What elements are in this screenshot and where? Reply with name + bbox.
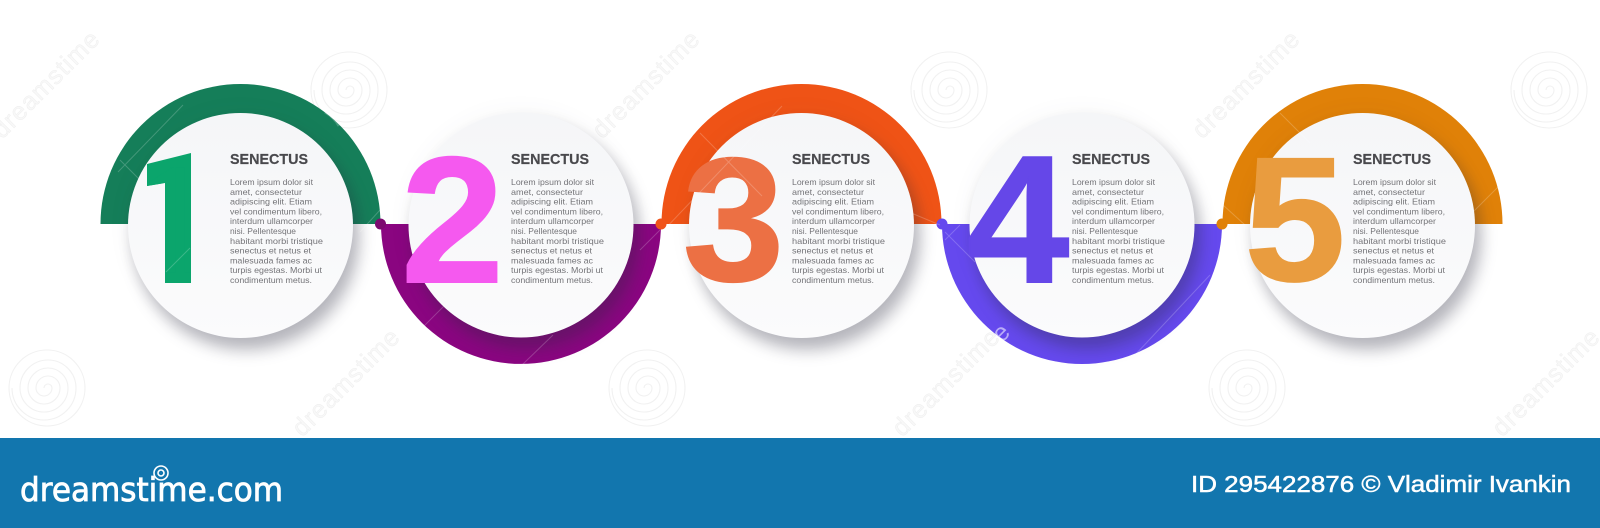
number 3: 3	[683, 122, 784, 319]
body text: Lorem ipsum dolor sit	[792, 177, 876, 187]
body text: malesuada fames ac	[792, 255, 874, 265]
body text: vel condimentum libero,	[511, 206, 603, 216]
orange arc	[662, 84, 942, 224]
heading: SENECTUS	[1353, 151, 1431, 168]
green arc	[100, 84, 380, 224]
card circle	[1250, 113, 1475, 338]
panel: step 5	[1222, 84, 1502, 338]
card circle	[970, 112, 1194, 338]
watermark spirals and wordmarks: dreamstime	[1187, 25, 1306, 144]
number 2: 2	[401, 120, 504, 321]
heading: SENECTUS	[1072, 151, 1150, 168]
number 4: 4	[967, 117, 1069, 321]
body text: nisi. Pellentesque	[511, 226, 577, 236]
card circle	[128, 113, 353, 338]
heading: SENECTUS	[511, 151, 589, 168]
body text: condimentum metus.	[792, 275, 874, 285]
body text: Lorem ipsum dolor sit	[230, 177, 314, 187]
body text: adipiscing elit. Etiam	[792, 197, 874, 207]
body text	[1353, 177, 1446, 285]
violet arc	[942, 224, 1222, 364]
body text: adipiscing elit. Etiam	[1353, 197, 1435, 207]
body text: senectus et netus et	[511, 246, 593, 256]
body text: vel condimentum libero,	[230, 206, 322, 216]
body text: turpis egestas. Morbi ut	[1072, 265, 1165, 275]
panel: step 2	[381, 112, 661, 364]
body text: adipiscing elit. Etiam	[230, 197, 312, 207]
body text: senectus et netus et	[792, 246, 874, 256]
body text: habitant morbi tristique	[1353, 236, 1446, 246]
watermark spirals and wordmarks	[0, 25, 1600, 442]
body text	[792, 177, 885, 285]
body text: interdum ullamcorper	[230, 216, 313, 226]
body text: condimentum metus.	[511, 275, 593, 285]
heading: SENECTUS	[230, 151, 308, 168]
body text: amet, consectetur	[230, 187, 302, 197]
body text: amet, consectetur	[511, 187, 583, 197]
purple arc	[381, 224, 661, 364]
body text: interdum ullamcorper	[1072, 216, 1155, 226]
body text: Lorem ipsum dolor sit	[1072, 177, 1156, 187]
body text: turpis egestas. Morbi ut	[511, 265, 604, 275]
body text: habitant morbi tristique	[511, 236, 604, 246]
panel: step 3	[662, 84, 942, 338]
amber arc	[1222, 84, 1502, 224]
body text: malesuada fames ac	[230, 255, 312, 265]
connector dots	[375, 218, 1228, 230]
heading: SENECTUS	[792, 151, 870, 168]
watermark spirals and wordmarks: dreamstime	[587, 25, 706, 144]
body text: condimentum metus.	[230, 275, 312, 285]
body text	[511, 177, 604, 285]
body text: condimentum metus.	[1353, 275, 1435, 285]
body text: amet, consectetur	[1353, 187, 1425, 197]
body text: nisi. Pellentesque	[1072, 226, 1138, 236]
body text: turpis egestas. Morbi ut	[1353, 265, 1446, 275]
body text: interdum ullamcorper	[511, 216, 594, 226]
body text: nisi. Pellentesque	[230, 226, 296, 236]
number 5: 5	[1244, 121, 1346, 319]
watermark spirals and wordmarks: dreamstime	[287, 323, 406, 442]
body text: turpis egestas. Morbi ut	[792, 265, 885, 275]
body text: adipiscing elit. Etiam	[1072, 197, 1154, 207]
body text: adipiscing elit. Etiam	[511, 197, 593, 207]
card circle	[689, 113, 914, 338]
body text: malesuada fames ac	[1353, 255, 1435, 265]
watermark letter on violet arc: e	[986, 318, 1016, 348]
watermark lines over arcs	[118, 105, 1520, 365]
image id and author: ID 295422876 © Vladimir Ivankin	[1191, 471, 1571, 497]
body text: vel condimentum libero,	[1353, 206, 1445, 216]
body text	[1072, 177, 1165, 285]
body text: senectus et netus et	[1072, 246, 1154, 256]
body text: amet, consectetur	[792, 187, 864, 197]
brand wordmark: dreamstime.com	[20, 470, 283, 509]
body text: senectus et netus et	[1353, 246, 1435, 256]
body text: condimentum metus.	[1072, 275, 1154, 285]
body text: Lorem ipsum dolor sit	[511, 177, 595, 187]
brand spiral icon	[154, 466, 168, 480]
body text: malesuada fames ac	[511, 255, 593, 265]
body text: vel condimentum libero,	[1072, 206, 1164, 216]
card circle	[408, 112, 634, 338]
body text: malesuada fames ac	[1072, 255, 1154, 265]
body text	[230, 177, 323, 285]
body text: habitant morbi tristique	[230, 236, 323, 246]
number 1: 1	[126, 121, 226, 322]
panel: step 1	[100, 84, 380, 338]
body text: nisi. Pellentesque	[792, 226, 858, 236]
body text: Lorem ipsum dolor sit	[1353, 177, 1437, 187]
body text: senectus et netus et	[230, 246, 312, 256]
body text: interdum ullamcorper	[1353, 216, 1436, 226]
watermark spirals and wordmarks: dreamstime	[887, 323, 1006, 442]
body text: habitant morbi tristique	[792, 236, 885, 246]
body text: interdum ullamcorper	[792, 216, 875, 226]
panel: step 4	[942, 112, 1222, 364]
body text: turpis egestas. Morbi ut	[230, 265, 323, 275]
body text: vel condimentum libero,	[792, 206, 884, 216]
body text: amet, consectetur	[1072, 187, 1144, 197]
footer banner	[0, 438, 1600, 528]
body text: nisi. Pellentesque	[1353, 226, 1419, 236]
body text: habitant morbi tristique	[1072, 236, 1165, 246]
